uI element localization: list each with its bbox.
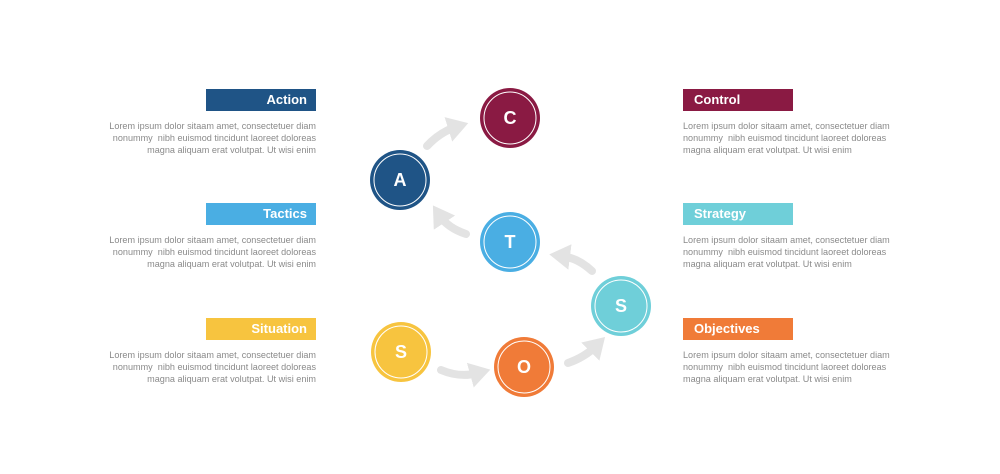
arrow: T to A — [440, 216, 466, 234]
arrow: S to O — [441, 370, 478, 375]
label: Strategy: Strategy — [694, 206, 746, 221]
label: Action — [206, 89, 316, 111]
label: Objectives: Objectives — [694, 321, 760, 336]
text: Objectives: Lorem ipsum dolor sitaam amet, consectetuer diam nonummy nibh euismod tincidunt laoreet doloreas magna aliquam erat volutpat. Ut wisi enim — [683, 350, 890, 384]
label: Control: Control — [694, 92, 740, 107]
arrow: S to T — [562, 256, 592, 271]
circle: S strategy: S — [615, 296, 627, 316]
text: Control: Lorem ipsum dolor sitaam amet, consectetuer diam nonummy nibh euismod tincidunt laoreet doloreas magna aliquam erat volutpat. Ut wisi enim — [683, 121, 890, 155]
label: Objectives — [683, 318, 793, 340]
circle: S strategy — [591, 276, 651, 336]
label: Strategy — [683, 203, 793, 225]
circle: O: O — [517, 357, 531, 377]
label: Tactics — [206, 203, 316, 225]
text: Tactics: Lorem ipsum dolor sitaam amet, consectetuer diam nonummy nibh euismod tincidunt laoreet doloreas magna aliquam erat volutpat. Ut wisi enim — [109, 235, 316, 269]
label: Situation — [206, 318, 316, 340]
label: Action: Action — [267, 92, 307, 107]
circle: C: C — [504, 108, 516, 128]
text: Strategy: Lorem ipsum dolor sitaam amet, consectetuer diam nonummy nibh euismod tincidunt laoreet doloreas magna aliquam erat volutpat. Ut wisi enim — [683, 235, 890, 269]
circle: O — [494, 337, 554, 397]
circle: A: A — [394, 170, 406, 190]
circle: S situation: S — [395, 342, 407, 362]
arrow: O to S — [568, 346, 596, 363]
circle: T — [480, 212, 540, 272]
label: Tactics: Tactics — [263, 206, 307, 221]
circle: T: T — [504, 232, 516, 252]
label: Situation: Situation — [251, 321, 307, 336]
label: Control — [683, 89, 793, 111]
text: Situation: Lorem ipsum dolor sitaam amet, consectetuer diam nonummy nibh euismod tincidunt laoreet doloreas magna aliquam erat volutpat. Ut wisi enim — [109, 350, 316, 384]
circle: A — [370, 150, 430, 210]
circle: S situation — [371, 322, 431, 382]
arrow: A to C — [427, 127, 456, 146]
text: Action: Lorem ipsum dolor sitaam amet, consectetuer diam nonummy nibh euismod tincidunt laoreet doloreas magna aliquam erat volutpat. Ut wisi enim — [109, 121, 316, 155]
circle: C — [480, 88, 540, 148]
